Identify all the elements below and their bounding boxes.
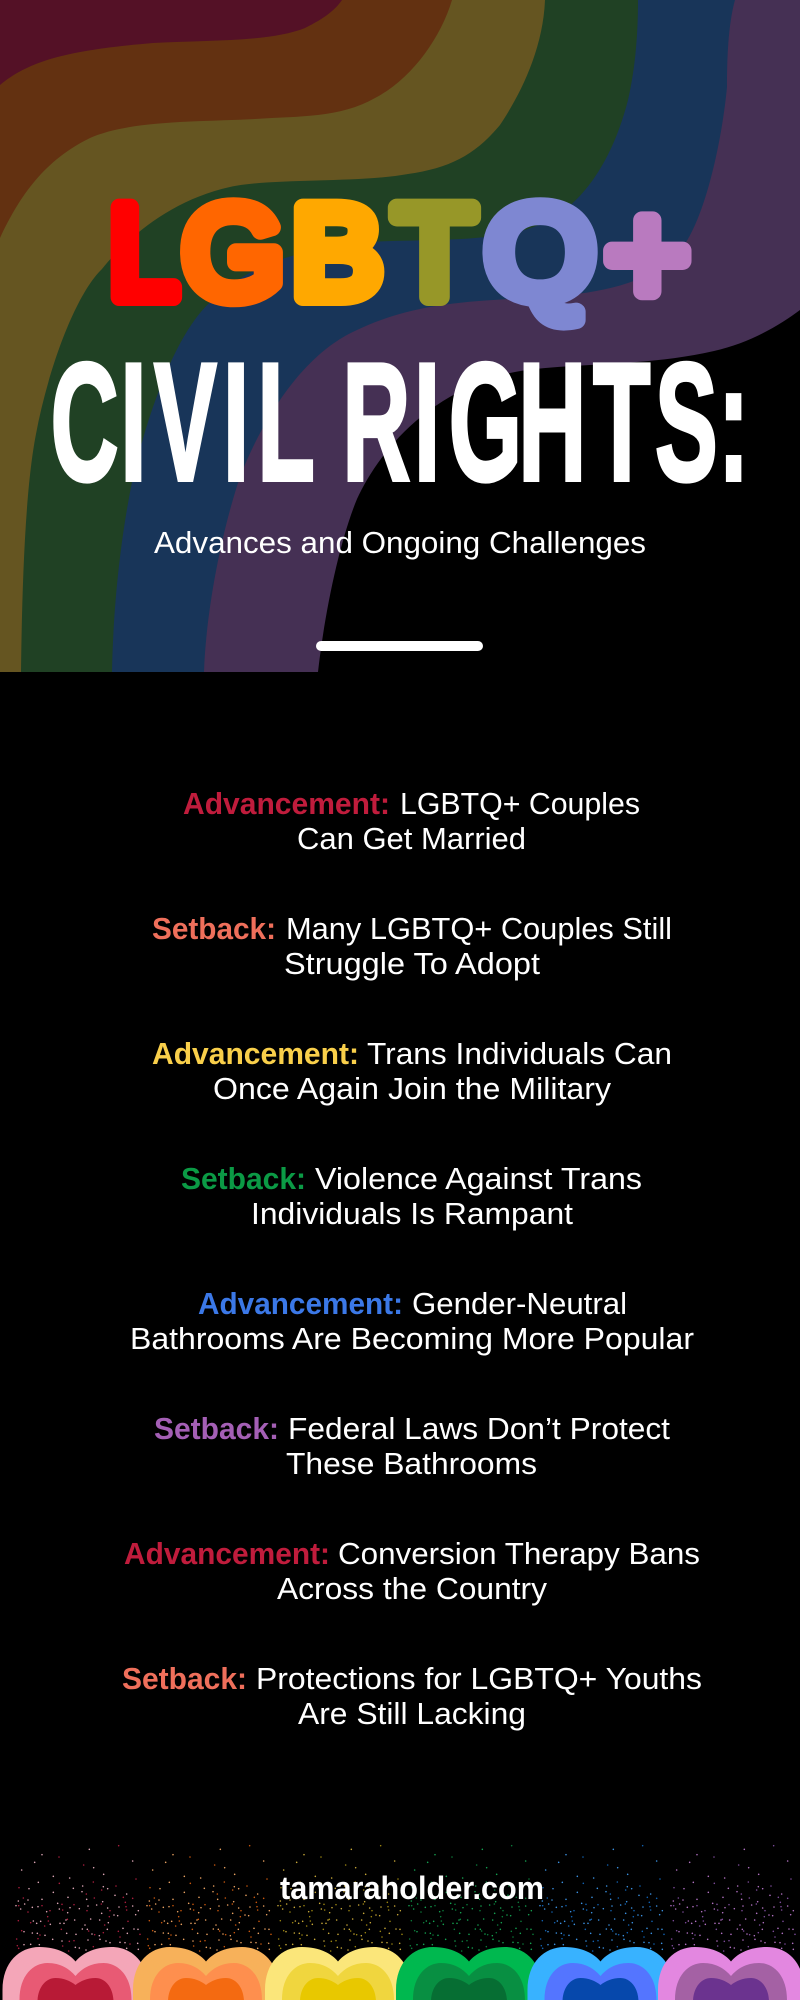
icon: pink heart <box>2 1947 148 2000</box>
item 3: advancement, military: Once Again Join the Military <box>213 1071 612 1106</box>
icon: green heart <box>396 1947 542 2000</box>
item 8: setback, youth protections: Protections for LGBTQ+ Youths <box>256 1661 702 1696</box>
heading: CIVIL RIGHTS:: CIVIL RIGHTS: <box>51 328 749 516</box>
item 2: setback, adoption: Many LGBTQ+ Couples Still <box>286 911 672 946</box>
item 2: setback, adoption: Setback: <box>152 911 276 946</box>
item 3: advancement, military: Trans Individuals Can <box>367 1036 672 1071</box>
item 7: advancement, conversion therapy <box>124 1536 700 1606</box>
heading: LGBTQ+ rainbow letters: T <box>394 179 475 325</box>
divider bar <box>316 641 483 651</box>
item 6: setback, federal laws: These Bathrooms <box>286 1446 537 1481</box>
item 5: advancement, bathrooms <box>130 1286 694 1356</box>
item 3: advancement, military: Advancement: <box>152 1036 359 1071</box>
item 3: advancement, military <box>152 1036 672 1106</box>
item 5: advancement, bathrooms: Advancement: <box>198 1286 403 1321</box>
heading: LGBTQ+ rainbow letters <box>109 173 690 335</box>
item 7: advancement, conversion therapy: Across the Country <box>277 1571 548 1606</box>
item 1: advancement, marriage: Advancement: <box>183 786 390 821</box>
heading: LGBTQ+ rainbow letters: B <box>292 180 382 325</box>
heading: LGBTQ+ rainbow letters: L <box>109 179 178 325</box>
heading: LGBTQ+ rainbow letters: + <box>605 173 690 335</box>
item 8: setback, youth protections <box>122 1661 702 1731</box>
row of rainbow hearts <box>2 1947 800 2000</box>
confetti dots above hearts <box>16 1846 795 1951</box>
item 2: setback, adoption <box>152 911 672 981</box>
item 6: setback, federal laws: Federal Laws Don’t Protect <box>288 1411 670 1446</box>
website url: tamaraholder.com <box>280 1870 544 1906</box>
item 1: advancement, marriage: LGBTQ+ Couples <box>400 786 640 821</box>
item 5: advancement, bathrooms: Gender-Neutral <box>412 1286 627 1321</box>
heading: LGBTQ+ rainbow letters: G <box>182 179 284 325</box>
header rainbow wave bands <box>0 0 800 672</box>
item 6: setback, federal laws: Setback: <box>154 1411 279 1446</box>
item 8: setback, youth protections: Setback: <box>122 1661 247 1696</box>
list of advancements and setbacks <box>122 786 702 1731</box>
icon: purple heart <box>658 1947 800 2000</box>
item 4: setback, violence: Individuals Is Rampant <box>251 1196 573 1231</box>
item 4: setback, violence <box>181 1161 642 1231</box>
item 7: advancement, conversion therapy: Conversion Therapy Bans <box>338 1536 700 1571</box>
icon: orange heart <box>133 1947 279 2000</box>
item 1: advancement, marriage: Can Get Married <box>297 821 526 856</box>
icon: blue heart <box>528 1947 674 2000</box>
heading: LGBTQ+ rainbow letters: Q <box>486 180 595 325</box>
item 4: setback, violence: Setback: <box>181 1161 306 1196</box>
item 1: advancement, marriage <box>183 786 640 856</box>
item 5: advancement, bathrooms: Bathrooms Are Becoming More Popular <box>130 1321 694 1356</box>
item 6: setback, federal laws <box>154 1411 670 1481</box>
item 7: advancement, conversion therapy: Advancement: <box>124 1536 330 1571</box>
item 8: setback, youth protections: Are Still Lacking <box>298 1696 526 1731</box>
icon: yellow heart <box>265 1947 411 2000</box>
item 2: setback, adoption: Struggle To Adopt <box>284 946 540 981</box>
subtitle: Advances and Ongoing Challenges <box>154 525 646 560</box>
item 4: setback, violence: Violence Against Trans <box>315 1161 642 1196</box>
